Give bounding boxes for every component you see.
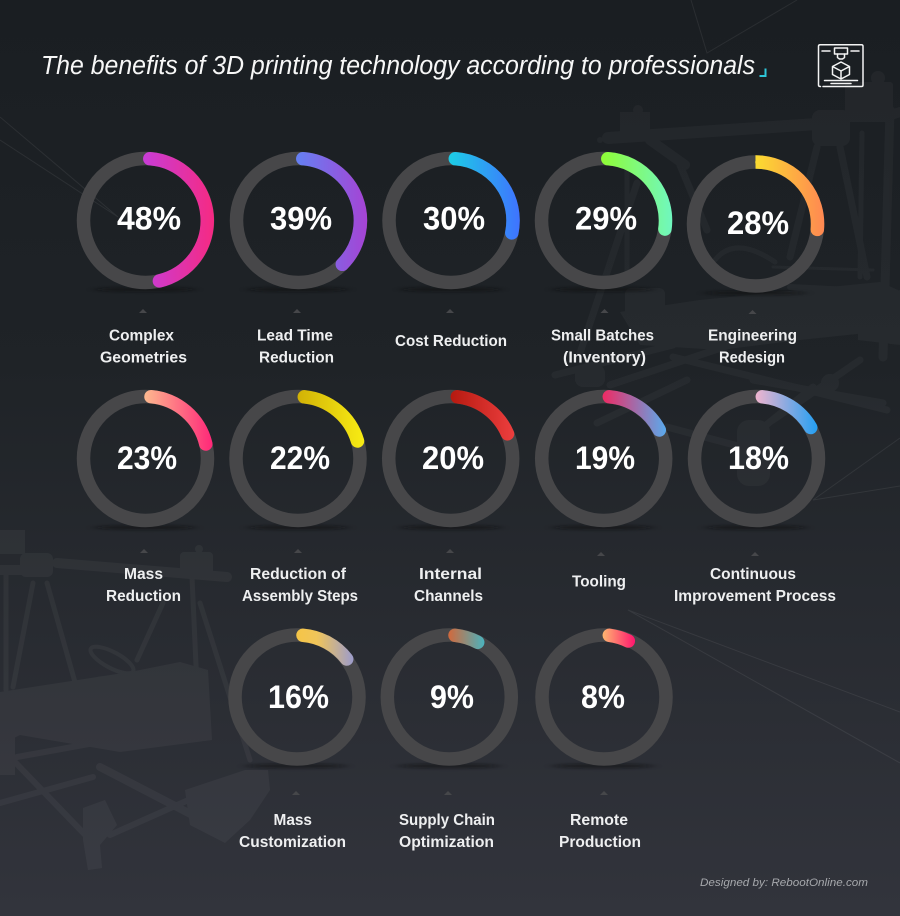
chart: 39% Lead Time Reduction [236, 158, 360, 367]
chart: 9% Supply Chain Optimization: 9% [430, 679, 474, 715]
chart: 29% Small Batches (Inventory) [542, 158, 666, 367]
title: The benefits of 3D printing technology according to professionals [41, 52, 755, 80]
chart: 39% Lead Time Reduction: 39% [270, 200, 332, 236]
chart: 28% Engineering Redesign: Engineering [708, 328, 797, 345]
chart: 28% Engineering Redesign: Redesign [719, 350, 785, 367]
chart: 20% Internal Channels [389, 396, 513, 605]
chart: 48% Complex Geometries: Geometries [100, 350, 187, 367]
chart: 8% Remote Production: 8% [581, 679, 625, 715]
chart: 19% Tooling: 19% [575, 440, 635, 476]
chart: 29% Small Batches (Inventory): Small Batches [551, 328, 654, 345]
chart: 16% Mass Customization: 16% [268, 679, 329, 715]
title corner accent [760, 68, 766, 76]
chart: 9% Supply Chain Optimization: Optimization [399, 834, 494, 851]
chart: 22% Reduction of Assembly Steps [236, 396, 360, 605]
chart: 18% Continuous Improvement Process: 18% [728, 440, 789, 476]
chart: 48% Complex Geometries: 48% [117, 200, 181, 236]
chart: 22% Reduction of Assembly Steps: Assembly Steps [242, 588, 358, 605]
chart: 39% Lead Time Reduction: Reduction [259, 350, 334, 367]
chart: 23% Mass Reduction: Mass [124, 566, 163, 583]
chart: 39% Lead Time Reduction: Lead Time [257, 328, 333, 345]
credit: Designed by: RebootOnline.com [700, 877, 868, 889]
chart: 28% Engineering Redesign [694, 162, 818, 367]
chart: 30% Cost Reduction [389, 158, 513, 350]
chart: 9% Supply Chain Optimization [387, 635, 511, 851]
chart: 18% Continuous Improvement Process: Continuous [710, 566, 796, 583]
chart: 18% Continuous Improvement Process: Improvement Process [674, 588, 836, 605]
background decoration: printer silhouette top right [555, 71, 900, 486]
chart: 48% Complex Geometries: Complex [109, 328, 174, 345]
chart: 8% Remote Production [542, 635, 666, 851]
chart: 20% Internal Channels: Channels [414, 588, 483, 605]
chart: 23% Mass Reduction: 23% [117, 440, 177, 476]
chart: 18% Continuous Improvement Process [674, 396, 836, 605]
chart: 20% Internal Channels: 20% [422, 440, 484, 476]
chart: 9% Supply Chain Optimization: Supply Chain [399, 812, 495, 829]
chart: 16% Mass Customization [235, 635, 359, 851]
chart: 23% Mass Reduction: Reduction [106, 588, 181, 605]
chart: 22% Reduction of Assembly Steps: Reduction of [250, 566, 347, 583]
chart: 19% Tooling: Tooling [572, 574, 626, 591]
chart: 29% Small Batches (Inventory): 29% [575, 200, 637, 236]
background decoration: printer silhouette bottom left [0, 530, 270, 870]
chart: 19% Tooling [542, 396, 666, 591]
chart: 30% Cost Reduction: 30% [423, 200, 485, 236]
chart: 23% Mass Reduction [84, 396, 208, 605]
chart: 8% Remote Production: Production [559, 834, 641, 851]
icon: 3D printer [818, 45, 863, 86]
chart: 22% Reduction of Assembly Steps: 22% [270, 440, 330, 476]
chart: 8% Remote Production: Remote [570, 812, 628, 829]
chart: 20% Internal Channels: Internal [419, 566, 482, 583]
chart: 29% Small Batches (Inventory): (Inventory) [563, 350, 646, 367]
chart: 16% Mass Customization: Customization [239, 834, 346, 851]
chart: 30% Cost Reduction: Cost Reduction [395, 333, 507, 350]
chart: 16% Mass Customization: Mass [274, 812, 312, 829]
chart: 48% Complex Geometries [84, 158, 208, 367]
chart: 28% Engineering Redesign: 28% [727, 205, 789, 241]
